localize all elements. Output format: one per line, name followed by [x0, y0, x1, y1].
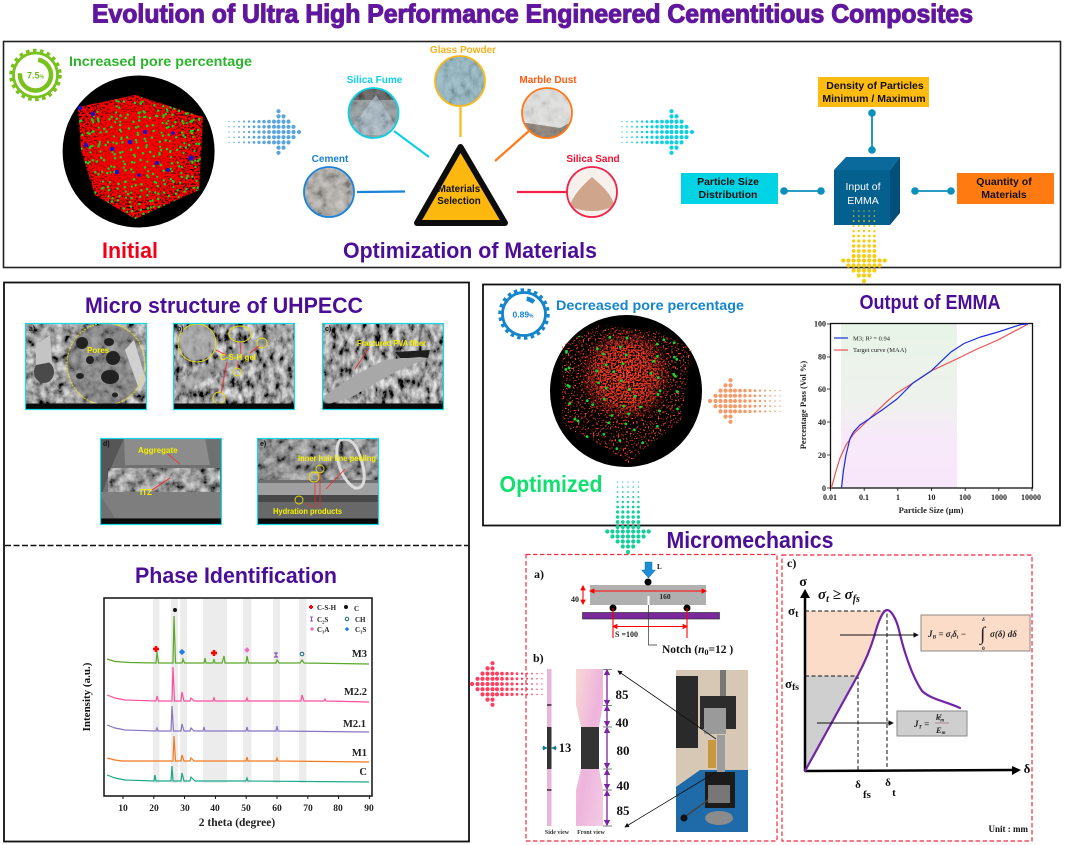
- axes: [800, 589, 1021, 775]
- bending test diagram: 160: [659, 592, 671, 601]
- icon: green gear 7.5%: 7.5%: [27, 70, 45, 80]
- specimen front view: [576, 669, 606, 836]
- specimen side view: 13: [559, 741, 571, 755]
- dimension line and numbers: 80: [616, 743, 630, 758]
- tensile test photo: [676, 670, 748, 832]
- callout: JT equation: E: [936, 725, 942, 735]
- chart x tick labels: 1000: [991, 493, 1007, 502]
- curve labels and axis symbols: δ: [1024, 761, 1031, 776]
- label c: c): [787, 556, 796, 570]
- curve labels and axis symbols: fs: [863, 789, 872, 801]
- curve labels and axis symbols: t: [826, 594, 830, 605]
- title: Evolution of Ultra High Performance Engineered Cementitious Composites: [92, 0, 973, 28]
- pointer arrows: [817, 635, 918, 723]
- chart legend: [834, 336, 907, 354]
- chart x tick labels: [823, 493, 1041, 502]
- phase identification heading: Phase Identification: [135, 563, 337, 588]
- panel: optimized and output of EMMA: [483, 284, 1060, 526]
- curve labels and axis symbols: ≥ σ: [829, 587, 854, 603]
- label a: a): [534, 567, 544, 581]
- chart x tick labels: 0.1: [859, 493, 869, 502]
- SEM image d: aggregate and ITZ: Aggregate: [138, 446, 178, 455]
- material: cement: [304, 154, 354, 217]
- chart y tick labels: 80: [818, 352, 826, 362]
- callout: JT equation: T: [918, 724, 922, 730]
- curve labels and axis symbols: δ: [885, 777, 891, 789]
- callout: JB equation: 0: [982, 646, 985, 652]
- XRD legend: S: [324, 616, 328, 624]
- callout: JT equation: m: [940, 718, 944, 724]
- EMMA input: density box: [818, 77, 929, 107]
- callout: JB equation: t: [957, 634, 959, 640]
- callout: JT equation: J: [914, 719, 918, 729]
- curve labels and axis symbols: Unit : mm: [988, 824, 1028, 834]
- shaded areas under curve: [805, 611, 887, 771]
- SEM image b: C-S-H gel: b): [177, 326, 184, 333]
- icon: blue gear 0.89%: [500, 290, 548, 338]
- XRD axis tick labels: 20: [149, 804, 159, 814]
- SEM image c: fractured PVA fiber: c): [325, 326, 331, 333]
- chart y tick labels: 40: [818, 418, 826, 427]
- guide lines: [805, 611, 887, 771]
- curve labels and axis symbols: fs: [853, 594, 860, 605]
- stress curve: [805, 610, 960, 771]
- chart y tick labels: 20: [818, 451, 826, 460]
- curve labels and axis symbols: fs: [792, 683, 799, 693]
- EMMA input: density box: Minimum / Maximum: [822, 93, 926, 105]
- bending test diagram: L: [657, 563, 662, 571]
- material: silica sand: Silica Sand: [566, 154, 620, 165]
- SEM image b: C-S-H gel: C-S-H gel: [220, 353, 256, 362]
- dimension line and numbers: [603, 670, 630, 826]
- optimized to micromechanics arrow: [607, 482, 649, 552]
- chart x tick labels: 10: [928, 493, 936, 502]
- material: glass powder: Glass Powder: [430, 45, 496, 56]
- EMMA input: particle size box: [681, 173, 778, 204]
- chart ticks: [827, 324, 1032, 491]
- chart legend: M3; R² = 0.94: [853, 336, 891, 342]
- panel: optimization of materials: [4, 42, 1060, 268]
- EMMA input: particle size box: Particle Size: [697, 176, 759, 188]
- materials selection triangle: Selection: [437, 196, 481, 207]
- EMMA input cube: Input of: [845, 181, 881, 193]
- EMMA input: quantity box: Materials: [981, 189, 1027, 201]
- XRD axis tick labels: 60: [272, 804, 282, 814]
- icon: green gear 7.5%: [12, 51, 60, 99]
- bending test diagram: Notch (n: [662, 644, 704, 656]
- XRD curve M2.1: [107, 706, 369, 732]
- XRD legend: [309, 604, 366, 634]
- decreased pore percentage label: Decreased pore percentage: [556, 298, 745, 313]
- curve labels and axis symbols: σ: [818, 587, 826, 603]
- curve: target curve MAA: [831, 324, 1028, 488]
- SEM image a: pores: [25, 323, 147, 410]
- specimen side view: Side view: [545, 830, 570, 836]
- XRD curve C: [107, 766, 369, 782]
- SEM image e: hydration products: Inner hair line peeling: [298, 454, 376, 463]
- EMMA input: particle size box: Distribution: [699, 189, 757, 201]
- XRD curve M1: [107, 736, 369, 762]
- callout: JB equation: t: [951, 634, 953, 640]
- callout: JB equation: J: [928, 629, 932, 639]
- SEM image d: aggregate and ITZ: [100, 438, 222, 525]
- bending test diagram: =12 ): [708, 644, 733, 656]
- material: silica fume: [346, 75, 403, 138]
- icon: blue gear 0.89%: 0.89%: [512, 310, 534, 320]
- callout: JB equation: [921, 615, 1030, 652]
- initial label: Initial: [102, 238, 158, 263]
- XRD axes frame and ticks: [104, 598, 372, 799]
- material: glass powder: [430, 45, 496, 106]
- arrows from photo to specimen: [618, 671, 716, 827]
- material: marble dust: [519, 75, 577, 140]
- dimension line and numbers: 40: [616, 715, 628, 730]
- XRD axis tick labels: [118, 804, 374, 814]
- specimen side view: [542, 669, 571, 836]
- XRD legend: C: [354, 605, 359, 613]
- output to optimized arrow: [710, 380, 780, 422]
- material: cement: Cement: [312, 154, 349, 165]
- curve labels and axis symbols: δ: [855, 779, 861, 791]
- XRD axis tick labels: 70: [303, 804, 313, 814]
- callout: JT equation: m: [942, 731, 946, 736]
- XRD legend: S: [362, 626, 366, 634]
- optimized pore scan sphere: [550, 315, 702, 467]
- connector lines: [357, 107, 567, 192]
- SEM image e: hydration products: Hydration products: [273, 507, 343, 516]
- panel: stress-crack opening curve: [782, 555, 1032, 841]
- XRD legend: A: [324, 626, 329, 634]
- XRD axis tick labels: 50: [241, 804, 251, 814]
- chart legend: Target curve (MAA): [853, 347, 907, 354]
- XRD axis tick labels: 90: [364, 804, 374, 814]
- SEM image e: hydration products: [257, 438, 379, 525]
- XRD axis tick labels: 40: [210, 804, 220, 814]
- callout: JT equation: 2: [938, 714, 942, 720]
- curve labels and axis symbols: t: [892, 787, 896, 799]
- XRD highlight bands: [153, 599, 306, 783]
- chart x tick labels: 0.01: [823, 493, 837, 502]
- bending test diagram: [571, 562, 733, 657]
- SEM image d: aggregate and ITZ: ITZ: [140, 488, 152, 497]
- XRD curve labels: M1: [352, 748, 367, 759]
- EMMA input: density box: Density of Particles: [826, 80, 924, 92]
- bending test diagram: 40: [571, 595, 579, 604]
- bending test diagram: S =100: [615, 630, 638, 639]
- optimized label: Optimized: [500, 471, 602, 497]
- SEM image d: aggregate and ITZ: d): [103, 441, 110, 448]
- chart x axis title: Particle Size (µm): [899, 505, 964, 515]
- curve labels and axis symbols: t: [795, 609, 799, 620]
- XRD curve labels: M2.2: [344, 687, 367, 698]
- XRD curve labels: M2.1: [343, 719, 366, 730]
- material: silica fume: Silica Fume: [347, 75, 403, 86]
- SEM image b: C-S-H gel: [173, 323, 295, 410]
- micromechanics to phase identification arrow: [472, 663, 542, 705]
- XRD axis tick labels: 30: [180, 804, 190, 814]
- XRD phase markers: [153, 608, 304, 657]
- XRD curve M2.2: [107, 667, 369, 702]
- materials selection triangle: Materials: [438, 184, 481, 195]
- label b: b): [533, 651, 544, 665]
- dimension line and numbers: 85: [616, 803, 630, 818]
- XRD curve labels: M3: [352, 649, 367, 660]
- XRD curve labels: [343, 649, 367, 778]
- SEM image c: fractured PVA fiber: Fractured PVA fiber: [357, 339, 426, 348]
- callout: JT equation: [897, 711, 967, 736]
- XRD legend: C: [317, 616, 322, 624]
- micromechanics heading: Micromechanics: [666, 527, 834, 553]
- XRD legend: 3: [322, 630, 325, 634]
- curve labels and axis symbols: σ: [799, 575, 807, 590]
- initial pore scan sphere: [62, 75, 215, 228]
- EMMA input cube: [834, 157, 900, 225]
- XRD axis tick labels: 10: [118, 804, 128, 814]
- XRD axis tick labels: 80: [333, 804, 343, 814]
- XRD legend: C: [355, 626, 360, 634]
- pore sphere to materials arrow: [229, 111, 299, 153]
- dimension line and numbers: 40: [616, 778, 630, 793]
- callout: JB equation: δ: [952, 629, 957, 639]
- SEM image a: pores: Pores: [87, 346, 110, 355]
- EMMA to output arrow: [843, 211, 885, 281]
- chart x tick labels: 10000: [1021, 493, 1041, 502]
- chart y tick labels: 0: [822, 484, 826, 493]
- XRD curve labels: C: [359, 767, 367, 778]
- output of EMMA heading: Output of EMMA: [860, 292, 1000, 314]
- material: silica sand: [566, 154, 620, 217]
- callout: JT equation: k: [936, 712, 940, 722]
- connectors to EMMA: [780, 109, 955, 195]
- callout: JB equation: −: [958, 629, 966, 639]
- callout: JB equation: δ: [982, 617, 985, 623]
- chart y tick labels: 60: [818, 385, 826, 394]
- callout: JB equation: = σ: [936, 629, 952, 639]
- SEM image c: fractured PVA fiber: [322, 323, 444, 410]
- XRD legend: 3: [360, 630, 363, 634]
- callout: JB equation: B: [932, 634, 936, 640]
- XRD x axis title: 2 theta (degree): [199, 817, 275, 829]
- chart y tick labels: [814, 320, 826, 493]
- materials to EMMA arrow: [622, 111, 692, 153]
- particle size distribution chart: [798, 320, 1041, 515]
- material: marble dust: Marble Dust: [519, 75, 577, 86]
- XRD y axis title: Intensity (a.u.): [81, 662, 93, 731]
- XRD curve M3: [107, 616, 369, 664]
- XRD legend: C: [317, 626, 322, 634]
- XRD legend: CH: [355, 616, 366, 624]
- specimen front view: Front view: [577, 830, 606, 836]
- dimension line and numbers: 85: [616, 687, 629, 702]
- XRD legend: 2: [322, 620, 325, 624]
- EMMA input: quantity box: Quantity of: [976, 176, 1032, 188]
- panel: flexural and tensile test specimens: [526, 554, 777, 841]
- XRD legend: C-S-H: [317, 604, 337, 612]
- callout: JT equation: =: [922, 719, 929, 729]
- increased pore percentage label: Increased pore percentage: [69, 54, 253, 69]
- chart y axis title: Percentage Pass (Vol %): [798, 361, 808, 449]
- curve: M3: [842, 324, 1028, 488]
- chart x tick labels: 100: [959, 493, 971, 502]
- EMMA input: quantity box: [957, 173, 1054, 204]
- chart y tick labels: 100: [814, 320, 826, 328]
- XRD chart: [81, 598, 374, 829]
- panel: micro structure and phase identification: [4, 282, 469, 842]
- micro structure heading: Micro structure of UHPECC: [85, 293, 363, 318]
- EMMA input cube: EMMA: [847, 195, 879, 207]
- curve labels and axis symbols: σ: [788, 603, 795, 618]
- callout: JB equation: ∫: [979, 624, 987, 646]
- SEM image e: hydration products: e): [260, 441, 266, 448]
- curve labels and axis symbols: [785, 575, 1031, 834]
- callout: JB equation: σ(δ) dδ: [990, 629, 1017, 639]
- curve labels and axis symbols: σ: [785, 676, 792, 691]
- optimization of materials heading: Optimization of Materials: [343, 238, 597, 263]
- materials selection triangle: [417, 147, 505, 223]
- SEM image a: pores: a): [29, 326, 35, 333]
- bending test diagram: 0: [704, 648, 708, 657]
- chart x tick labels: 1: [896, 493, 900, 502]
